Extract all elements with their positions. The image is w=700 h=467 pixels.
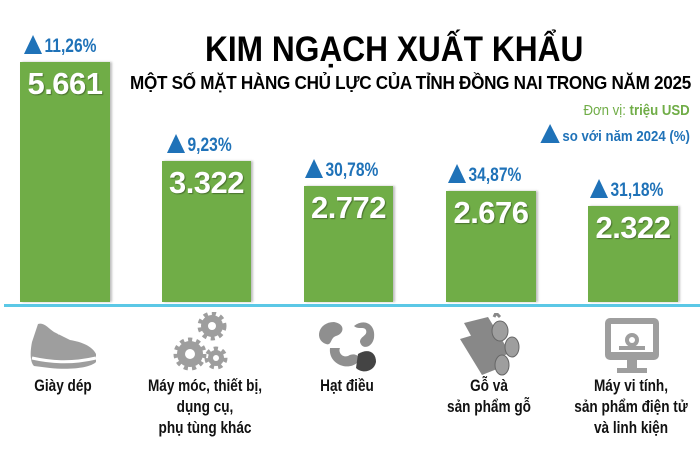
bar: Gỗ: 2.676	[453, 195, 529, 230]
icon: computer	[605, 318, 659, 373]
pct: Máy vi tính: 31,18%	[610, 180, 663, 201]
label: Máy móc: Máy móc, thiết bị,	[148, 376, 262, 395]
pct: Hạt điều	[305, 159, 378, 181]
label: Máy vi tính: sản phẩm điện tử	[574, 397, 688, 416]
subtitle: MỘT SỐ MẶT HÀNG CHỦ LỰC CỦA TỈNH ĐỒNG NAI TRONG NĂM 2025	[130, 73, 691, 93]
legend: so với năm 2024 (%)	[562, 128, 690, 145]
label: Gỗ: Gỗ và	[470, 376, 508, 395]
bar: Gỗ	[446, 191, 536, 302]
label: Gỗ: sản phẩm gỗ	[447, 397, 531, 416]
icon: logs	[460, 313, 520, 376]
bar: Máy vi tính: 2.322	[595, 210, 671, 245]
pct: Hạt điều: 30,78%	[326, 160, 378, 181]
title: KIM NGẠCH XUẤT KHẨU	[205, 30, 583, 69]
pct: Giày dép: 11,26%	[44, 36, 96, 57]
bar: Hạt điều	[304, 186, 393, 302]
bar: Máy vi tính	[588, 206, 678, 302]
label: Máy vi tính	[574, 376, 688, 437]
pct: Máy vi tính	[590, 179, 663, 201]
label: Gỗ	[447, 376, 531, 416]
unit note: Đơn vị: triệu USD	[584, 102, 690, 119]
bar: Máy móc: 3.322	[169, 165, 244, 200]
bar: Giày dép	[20, 62, 110, 302]
baseline	[4, 304, 700, 307]
label: Máy móc: dụng cụ,	[177, 397, 233, 416]
pct: Máy móc	[167, 134, 232, 156]
label: Máy móc: phụ tùng khác	[159, 418, 251, 437]
pct: Gỗ	[448, 164, 521, 186]
label: Hạt điều: Hạt điều	[320, 376, 374, 395]
label: Giày dép: Giày dép	[34, 376, 92, 395]
icon: shoe	[30, 324, 96, 369]
icon: gears	[174, 312, 228, 370]
label: Máy móc	[148, 376, 262, 437]
pct: Giày dép	[24, 35, 96, 57]
icon: cashew	[319, 322, 376, 372]
bar: Hạt điều: 2.772	[311, 190, 386, 225]
pct: Máy móc: 9,23%	[188, 135, 232, 156]
bar: Máy móc	[162, 161, 251, 302]
legend	[540, 124, 690, 145]
bar: Giày dép: 5.661	[27, 66, 103, 101]
pct: Gỗ: 34,87%	[468, 165, 521, 186]
label: Máy vi tính: Máy vi tính,	[594, 376, 668, 395]
label: Máy vi tính: và linh kiện	[594, 418, 668, 437]
